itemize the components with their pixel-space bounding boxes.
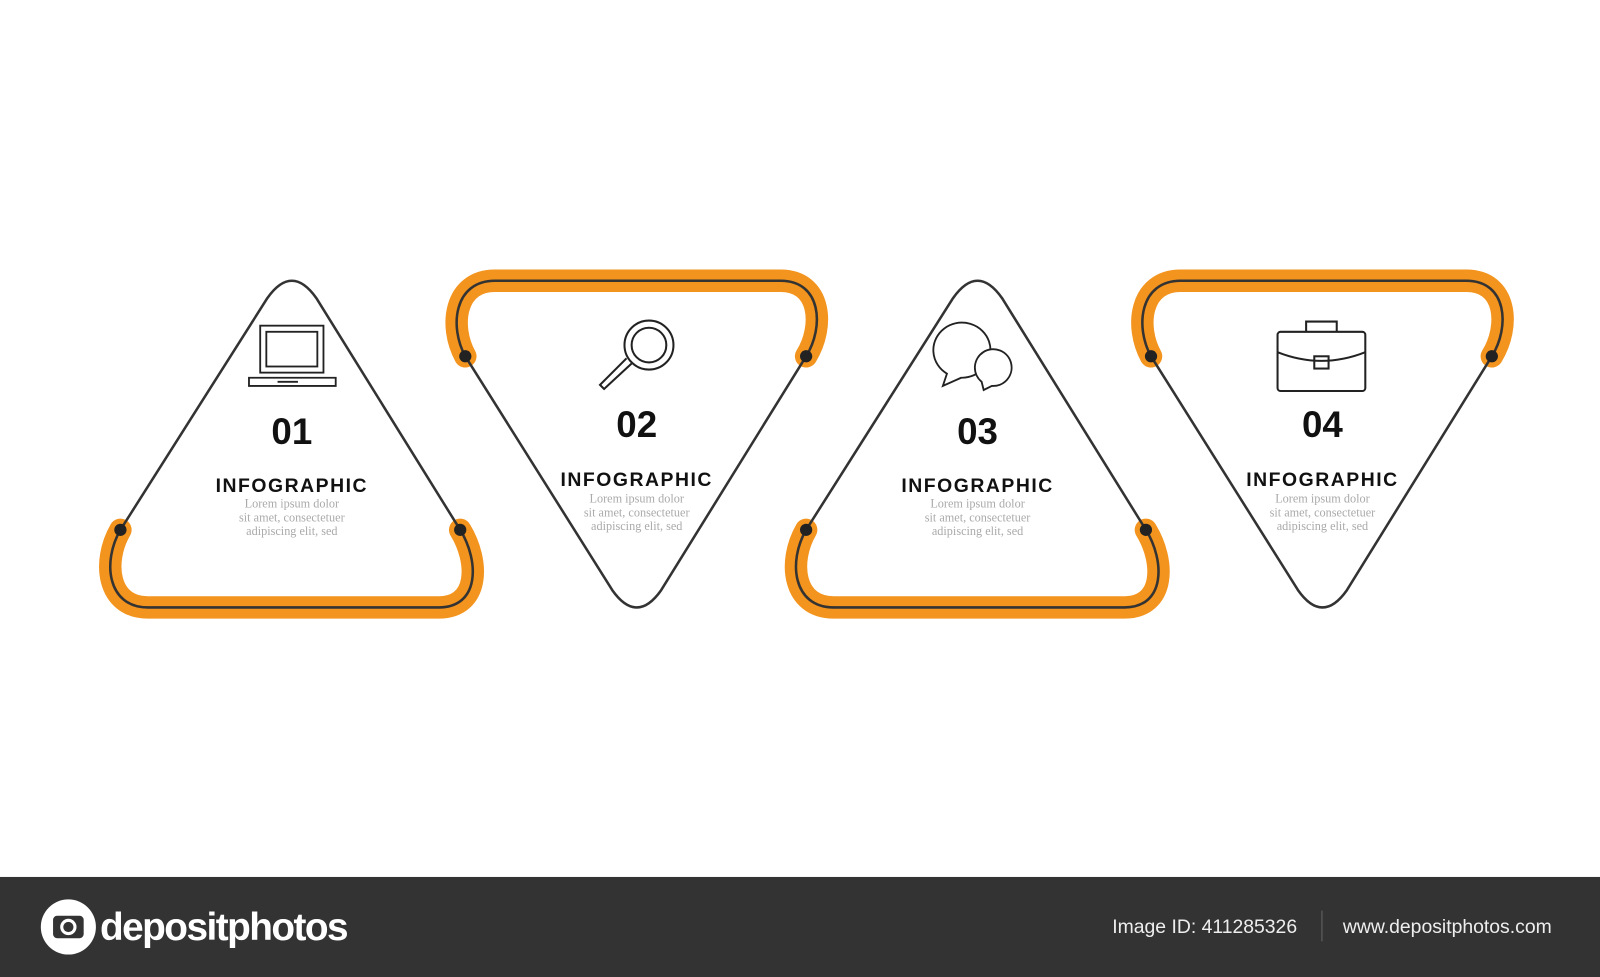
step 2 panel (457, 281, 817, 607)
footer bar (0, 877, 1600, 977)
step 1 panel (110, 281, 473, 607)
body text 3: sit amet, consectetuer (925, 511, 1030, 525)
triangle outline 4 (1142, 281, 1503, 607)
heading 2: INFOGRAPHIC (561, 469, 713, 491)
logo icon (41, 899, 96, 955)
number 02: 02 (616, 404, 657, 445)
number 01: 01 (271, 411, 312, 452)
image id: Image ID: 411285326 (1112, 916, 1297, 938)
heading 4: INFOGRAPHIC (1246, 469, 1399, 491)
body text 1: sit amet, consectetuer (239, 511, 345, 525)
triangle outline 2 (457, 281, 817, 607)
step 4 panel (1142, 281, 1503, 607)
body text 4 (1270, 491, 1375, 533)
triangle outline 3 (796, 281, 1159, 607)
logo text: depositphotos (100, 906, 347, 949)
step 3 panel (796, 281, 1159, 607)
orange base band 1 (110, 530, 473, 607)
number 04: 04 (1302, 404, 1343, 445)
body text 3 (925, 496, 1030, 538)
body text 3: Lorem ipsum dolor (930, 496, 1025, 510)
orange base band 3 (796, 530, 1159, 607)
site url: www.depositphotos.com (1342, 916, 1552, 938)
body text 1 (239, 496, 345, 538)
icon: laptop (249, 326, 336, 386)
heading 3: INFOGRAPHIC (901, 475, 1054, 497)
icon: magnifier (600, 321, 673, 389)
body text 1: Lorem ipsum dolor (245, 496, 339, 510)
body text 1: adipiscing elit, sed (246, 524, 338, 538)
body text 2: sit amet, consectetuer (584, 506, 690, 520)
heading 1: INFOGRAPHIC (216, 475, 368, 497)
body text 2 (584, 491, 690, 533)
orange top band 2 (457, 281, 817, 356)
body text 4: adipiscing elit, sed (1277, 519, 1368, 533)
body text 3: adipiscing elit, sed (932, 524, 1023, 538)
body text 2: adipiscing elit, sed (591, 519, 682, 533)
body text 2: Lorem ipsum dolor (590, 491, 684, 505)
body text 4: Lorem ipsum dolor (1275, 491, 1370, 505)
body text 4: sit amet, consectetuer (1270, 506, 1375, 520)
number 03: 03 (957, 411, 998, 452)
icon: speech bubbles (933, 323, 1012, 390)
triangle outline 1 (110, 281, 473, 607)
orange top band 4 (1142, 281, 1503, 356)
icon: briefcase (1278, 322, 1365, 391)
